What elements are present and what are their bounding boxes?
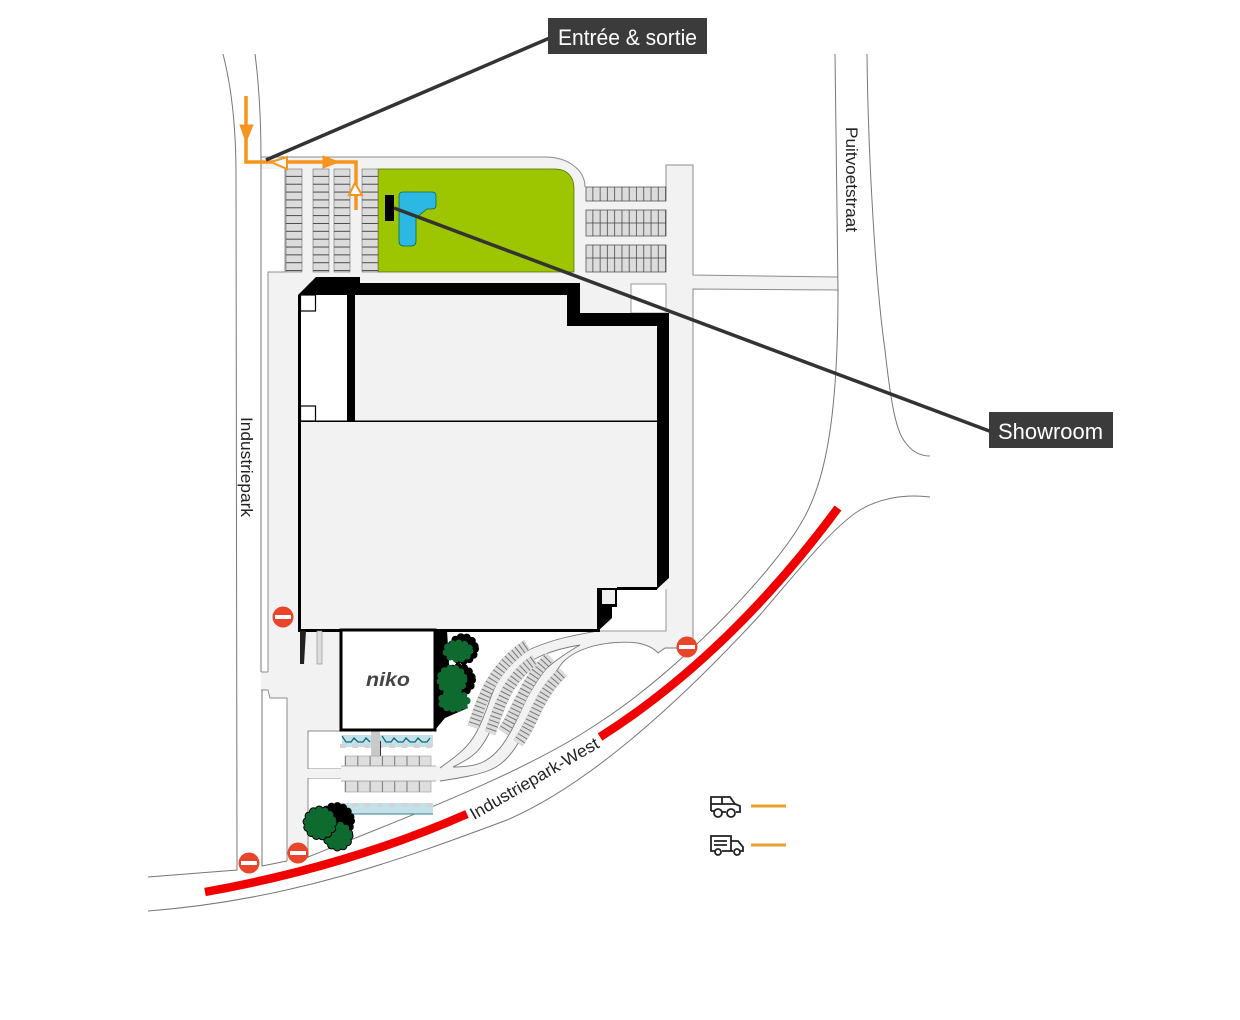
arrow: right — [323, 156, 339, 168]
trees near niko — [440, 637, 475, 709]
no entry signs — [238, 606, 698, 874]
road name: Industriepark: Industriepark — [237, 417, 256, 518]
loading stubs — [300, 631, 322, 664]
niko building — [341, 630, 468, 730]
label: Showroom — [989, 412, 1113, 448]
icon: car — [711, 797, 740, 817]
lawn with pond — [378, 169, 574, 272]
callout line: Showroom — [394, 208, 992, 432]
front parking — [305, 731, 440, 814]
legend: car — [711, 797, 786, 817]
trees near road — [307, 806, 351, 847]
legend: truck — [711, 836, 786, 855]
curved parking arcs — [473, 645, 563, 743]
showroom marker — [385, 195, 394, 221]
site grounds: paved area — [261, 157, 838, 861]
label: Showroom: Showroom — [998, 419, 1103, 444]
arrow: hollow up — [349, 183, 362, 195]
parking: right rows — [586, 187, 666, 272]
main building — [298, 277, 669, 632]
thick black walls — [298, 277, 669, 589]
orange route arrows — [240, 96, 362, 210]
parking: left rows — [286, 169, 378, 272]
label: Entrée & sortie — [548, 18, 707, 54]
arrow: down — [240, 125, 253, 142]
icon: truck — [711, 836, 743, 855]
icon: pond — [399, 192, 436, 246]
niko logo: niko — [366, 670, 410, 691]
label: Entrée & sortie: Entrée & sortie — [558, 25, 697, 50]
road outlines — [148, 54, 930, 911]
road name: Industriepark-West: Industriepark-West — [466, 734, 603, 823]
callout line: Entrée & sortie — [266, 37, 552, 160]
arrow: hollow left — [271, 157, 287, 169]
road name: Puitvoetstraat: Puitvoetstraat — [842, 127, 861, 232]
white office wing — [300, 295, 347, 421]
red road: Industriepark-West — [205, 508, 838, 892]
